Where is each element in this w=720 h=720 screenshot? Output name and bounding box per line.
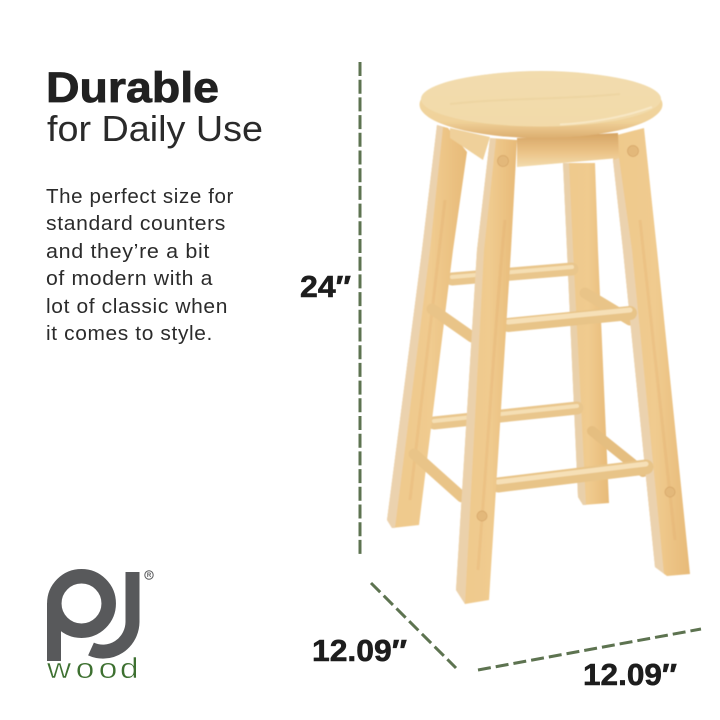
left leg bbox=[387, 125, 467, 528]
right leg bbox=[613, 128, 690, 576]
description text: The perfect size for bbox=[46, 186, 234, 208]
logo: PJ wood bbox=[46, 571, 153, 684]
left side rungs bbox=[414, 309, 472, 497]
description text: it comes to style. bbox=[46, 323, 213, 345]
description text: and they’re a bit bbox=[46, 241, 210, 263]
logo: PJ wood: R bbox=[147, 573, 152, 579]
upper and lower front rungs bbox=[498, 310, 646, 485]
width dimension line bbox=[478, 629, 701, 670]
front leg bbox=[456, 138, 517, 604]
logo: PJ wood: wood bbox=[46, 652, 139, 684]
round seat bbox=[420, 71, 662, 138]
description text: standard counters bbox=[46, 213, 226, 235]
depth dimension line bbox=[371, 583, 456, 668]
depth label: 12.09″ bbox=[312, 633, 407, 668]
title: Durable bbox=[46, 64, 219, 112]
description text bbox=[46, 186, 234, 345]
back rungs bbox=[434, 267, 643, 472]
description text: of modern with a bbox=[46, 268, 213, 290]
width label: 12.09″ bbox=[583, 657, 677, 692]
description text: lot of classic when bbox=[46, 296, 228, 318]
title bbox=[46, 64, 263, 149]
title: for Daily Use bbox=[47, 108, 263, 149]
height label: 24″ bbox=[300, 269, 351, 304]
apron under the seat bbox=[450, 128, 619, 167]
back leg bbox=[563, 163, 609, 505]
height dimension line bbox=[358, 62, 362, 556]
leg pegs bbox=[477, 146, 675, 521]
wooden stool illustration bbox=[387, 71, 690, 604]
